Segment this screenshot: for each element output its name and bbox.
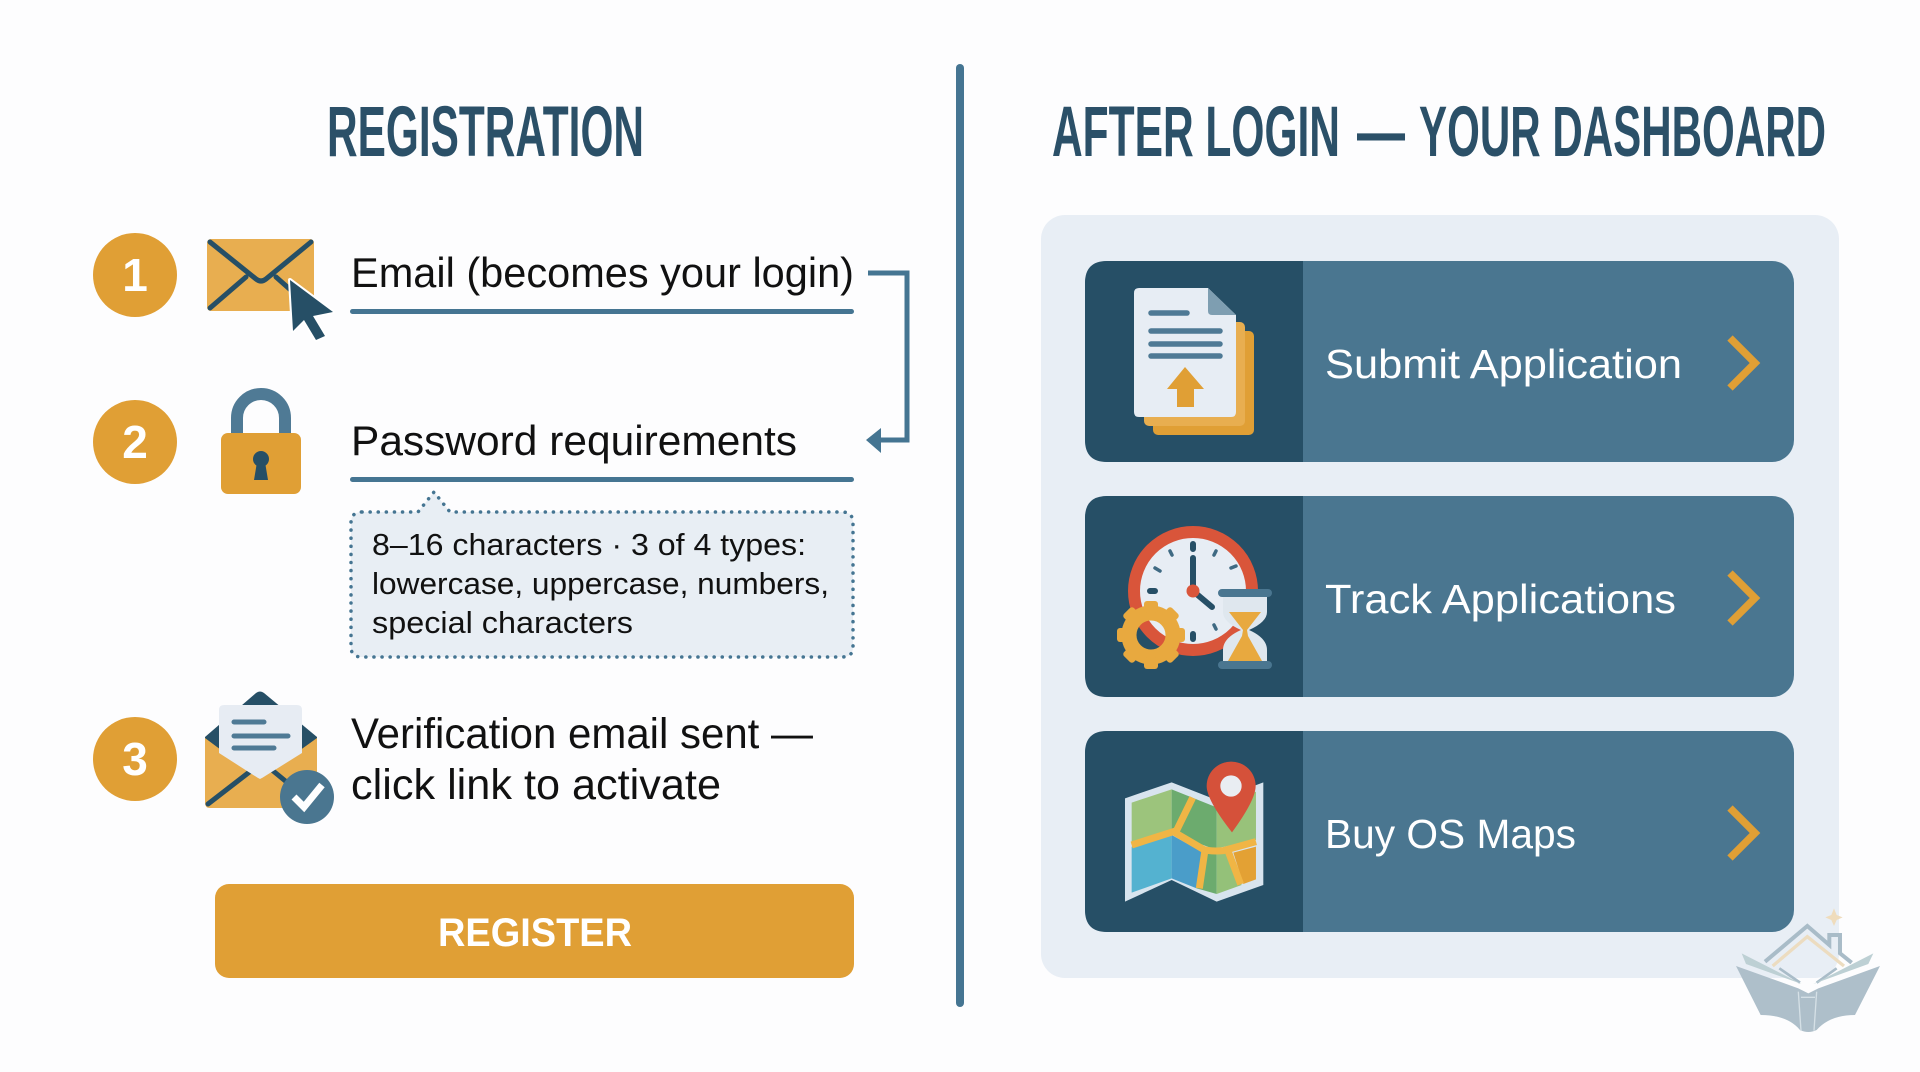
email underline	[350, 309, 854, 314]
title: after login dashboard: AFTER LOGIN	[1052, 93, 1340, 172]
text: verification	[351, 710, 813, 809]
text: verification: click link to activate	[351, 761, 721, 809]
password underline	[350, 477, 854, 482]
card: buy os maps	[1085, 731, 1794, 932]
step 2 badge: 2	[122, 416, 148, 468]
vertical divider	[956, 64, 964, 1007]
icon: clock gear hourglass	[1117, 532, 1272, 669]
title: registration: REGISTRATION	[327, 93, 644, 172]
label: track applications: Track Applications	[1325, 576, 1676, 622]
text: verification: Verification email sent —	[351, 710, 813, 758]
text: password requirements: Password requirements	[351, 417, 797, 464]
card: submit application	[1085, 261, 1794, 462]
step 2 badge	[93, 400, 177, 484]
icon: padlock	[221, 394, 301, 494]
title: after login dashboard: —	[1357, 93, 1405, 172]
chevron	[1730, 338, 1755, 388]
arrow: email to password	[866, 273, 907, 453]
panel: dashboard	[1041, 215, 1839, 978]
step 1 badge	[93, 233, 177, 317]
panel: registration steps	[93, 233, 907, 978]
callout: password rules	[351, 492, 853, 657]
label: buy os maps: Buy OS Maps	[1325, 811, 1576, 857]
title: after login dashboard	[1052, 93, 1826, 172]
icon: open envelope with check	[205, 692, 334, 824]
icon: folded map with pin	[1125, 762, 1263, 902]
icon: document upload	[1134, 288, 1254, 435]
chevron	[1730, 573, 1755, 623]
callout: password rules: lowercase, uppercase, numbers,	[372, 566, 829, 601]
watermark logo: book and house	[1736, 908, 1880, 1032]
chevron	[1730, 808, 1755, 858]
card: track applications	[1085, 496, 1794, 697]
step 3 badge	[93, 717, 177, 801]
button: register: REGISTER	[438, 911, 632, 955]
callout: password rules: 8–16 characters · 3 of 4 types:	[372, 527, 806, 562]
icon: envelope with cursor	[207, 239, 333, 340]
label: submit application: Submit Application	[1325, 341, 1682, 387]
button: register	[215, 884, 854, 978]
callout: password rules: special characters	[372, 605, 633, 640]
text: email: Email (becomes your login)	[351, 249, 854, 296]
step 3 badge: 3	[122, 733, 148, 785]
step 1 badge: 1	[122, 249, 148, 301]
